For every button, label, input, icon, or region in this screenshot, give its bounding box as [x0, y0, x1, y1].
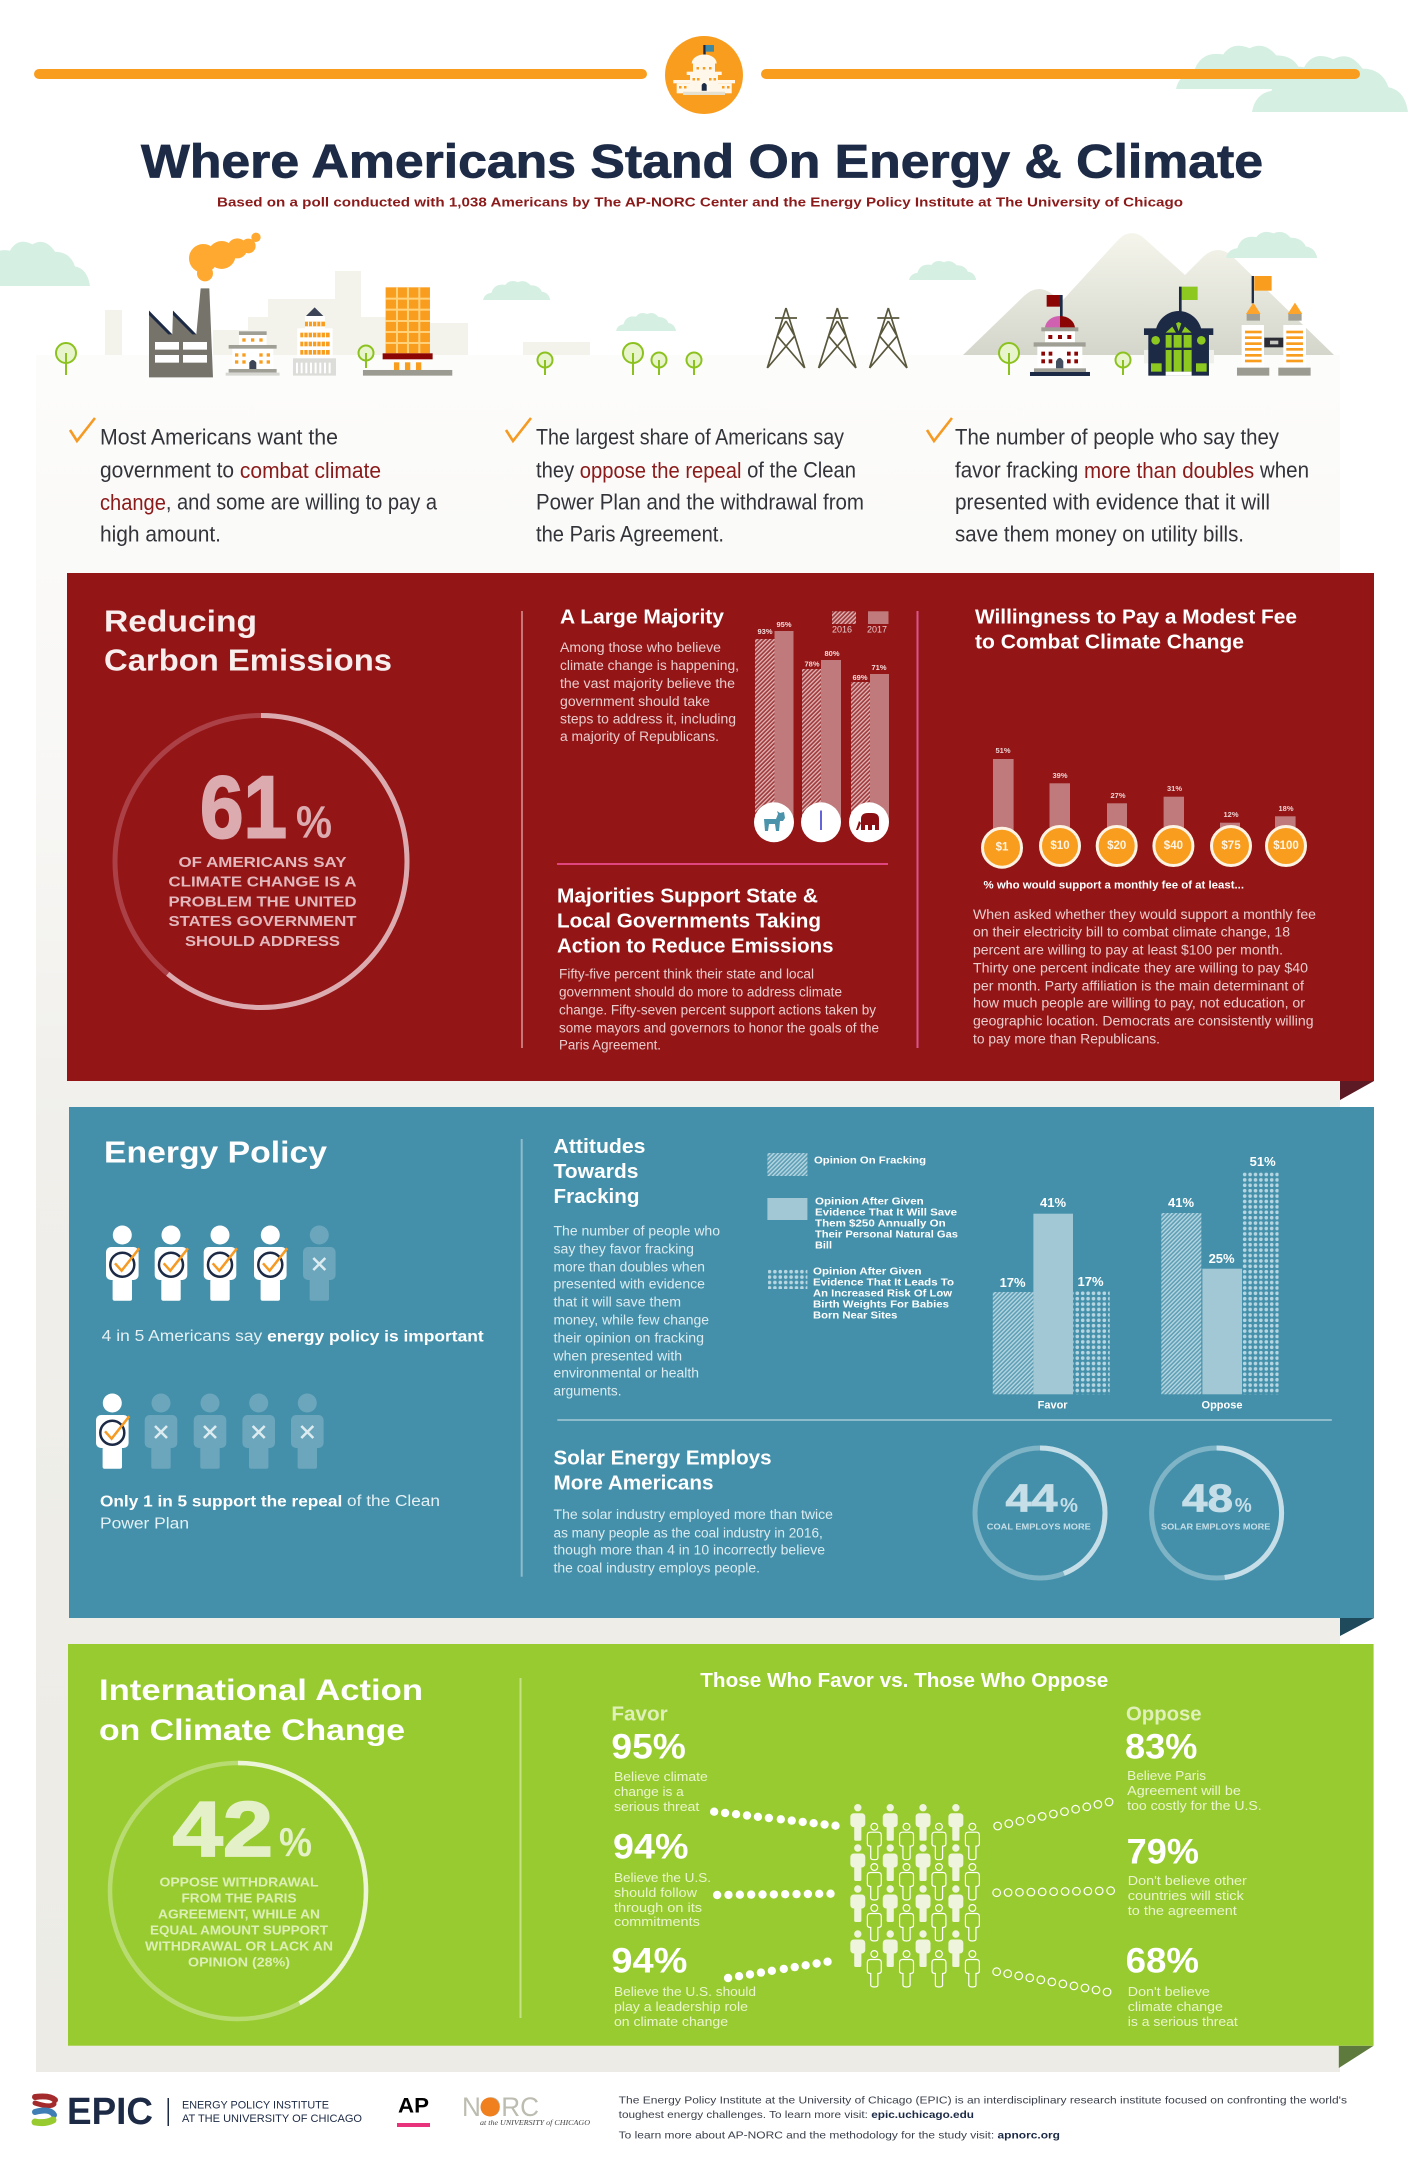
icon: red dome building — [1030, 295, 1090, 376]
bar chart: monthly fee: $10 — [1050, 840, 1070, 852]
stat ring: 42 percent: FROM THE PARIS — [182, 1892, 296, 1906]
text block: solar energy: Solar Energy Employs — [554, 1448, 772, 1470]
key finding 1: change, and some are willing to pay a — [100, 490, 437, 514]
icon: smoke — [189, 233, 261, 281]
bar chart: monthly fee: $100 — [1273, 840, 1299, 852]
bar chart: monthly fee: $20 — [1107, 840, 1126, 852]
column: oppose: Don't believe other — [1128, 1874, 1247, 1888]
legend: fracking chart: Them $250 Annually On — [815, 1218, 946, 1230]
key finding 3: save them money on utility bills. — [955, 522, 1244, 546]
cloud: top right back — [1176, 46, 1318, 89]
stat ring: 42 percent: EQUAL AMOUNT SUPPORT — [150, 1924, 328, 1938]
bar chart: favor and oppose fracking: 41% — [1168, 1195, 1194, 1210]
bar chart: support by party: 95% — [776, 620, 792, 629]
bar chart: support by party: 78% — [804, 660, 820, 668]
footer: AP logo — [397, 2094, 430, 2127]
stat ring: 61 percent — [115, 716, 407, 1008]
cloud: over mountains — [1226, 232, 1317, 258]
pictogram: crowd of people — [850, 1804, 979, 1987]
caption: 1 in 5: Only 1 in 5 support the repeal of the Clean — [100, 1493, 440, 1510]
bar chart: monthly fee: % who would support a monthly fee of at least... — [984, 880, 1244, 892]
pictogram: 4 in 5 — [106, 1226, 336, 1301]
column: favor: Believe the U.S. — [614, 1871, 711, 1885]
column: oppose: countries will stick — [1128, 1889, 1245, 1903]
key finding 3: presented with evidence that it will — [955, 490, 1270, 514]
panel fold — [1339, 2046, 1374, 2068]
subtitle: Based on a poll conducted with 1,038 Americans by The AP-NORC Center and the Energy Policy Institute at The University of Chicago — [217, 194, 1183, 210]
text block: attitudes towards fracking: when presented with — [552, 1348, 682, 1364]
column: oppose: 79% — [1127, 1832, 1199, 1872]
bar chart: favor and oppose fracking: 17% — [1000, 1275, 1026, 1290]
stat ring: 42 percent: OPINION (28%) — [188, 1956, 290, 1970]
title: Where Americans Stand On Energy & Climate — [141, 134, 1263, 188]
heading: international action: on Climate Change — [99, 1714, 405, 1747]
footer: NORC logo — [462, 2092, 590, 2127]
icon: orange flag towers — [1237, 276, 1311, 376]
legend: fracking chart: Evidence That It Will Save — [815, 1208, 958, 1218]
column: oppose: is a serious threat — [1128, 2015, 1238, 2029]
pylons — [767, 308, 907, 368]
legend: fracking chart: Opinion On Fracking — [814, 1156, 926, 1166]
cloud: small right — [909, 261, 976, 280]
mountains — [963, 233, 1334, 355]
footer: EPIC logo — [35, 2091, 362, 2133]
cloud: left — [0, 242, 90, 286]
stat ring: 61 percent: 61 — [200, 758, 287, 856]
text block: solar energy: though more than 4 in 10 incorrectly believe — [554, 1542, 825, 1558]
icon: republican elephant — [849, 802, 889, 842]
legend: 2016 — [832, 625, 852, 635]
text block: solar energy: the coal industry employs people. — [554, 1560, 760, 1576]
civic buildings group — [1030, 276, 1311, 376]
column: favor: change is a — [614, 1785, 684, 1799]
key finding 3: The number of people who say they — [955, 424, 1280, 450]
column: favor: play a leadership role — [614, 2000, 748, 2014]
text block: a large majority: climate change is happening, — [560, 658, 739, 673]
text block: fee explanation: When asked whether they would support a monthly fee — [973, 907, 1316, 922]
legend: fracking chart: Born Near Sites — [813, 1310, 898, 1322]
text block: majorities support: government should do more to address climate — [559, 984, 842, 1000]
bar chart: support by party — [754, 611, 889, 842]
icon: independent line — [801, 802, 841, 842]
stat ring: solar employs more: SOLAR EMPLOYS MORE — [1161, 1522, 1271, 1532]
bar chart: favor and oppose fracking — [993, 1154, 1279, 1412]
key finding 1: government to combat climate — [100, 458, 381, 482]
column: favor: on climate change — [614, 2015, 728, 2029]
stat ring: 42 percent: OPPOSE WITHDRAWAL — [160, 1876, 319, 1890]
stat ring: solar employs more: % — [1235, 1495, 1252, 1517]
column: favor: 94% — [613, 1828, 688, 1866]
text block: attitudes towards fracking: Attitudes — [554, 1136, 646, 1158]
column: oppose: 68% — [1126, 1942, 1199, 1980]
bar chart: favor and oppose fracking: 25% — [1209, 1251, 1235, 1266]
bar chart: monthly fee — [982, 746, 1306, 892]
text block: a large majority: A Large Majority — [560, 606, 725, 628]
bar chart: monthly fee: 12% — [1223, 810, 1239, 819]
key finding 3 — [927, 418, 1309, 546]
stat ring: 61 percent: SHOULD ADDRESS — [185, 933, 340, 950]
stat ring: solar employs more — [1152, 1448, 1282, 1578]
stat ring: solar employs more: 48 — [1182, 1478, 1233, 1520]
text block: fee explanation — [973, 907, 1316, 1046]
column: favor: Believe the U.S. should — [614, 1985, 756, 1999]
footer: EPIC logo: EPIC — [67, 2091, 153, 2133]
bar chart: monthly fee: 39% — [1052, 771, 1068, 780]
text block: majorities support: Fifty-five percent think their state and local — [559, 966, 814, 982]
legend: fracking chart: Evidence That It Leads To — [813, 1278, 954, 1288]
icon: check mark — [506, 418, 531, 441]
text block: attitudes towards fracking: more than doubles when — [554, 1260, 705, 1274]
bar chart: favor and oppose fracking: 41% — [1040, 1195, 1066, 1210]
legend: fracking chart: Birth Weights For Babies — [813, 1300, 949, 1310]
icon: capitol building — [673, 45, 735, 95]
heading: willingness to pay: to Combat Climate Change — [975, 631, 1244, 653]
column: oppose: Don't believe — [1128, 1985, 1210, 1999]
stat ring: 61 percent: OF AMERICANS SAY — [178, 854, 346, 871]
icon: democrat donkey — [754, 802, 794, 842]
text block: fee explanation: how much people are willing to pay, not education, or — [973, 996, 1306, 1010]
text block: a large majority: Among those who believe — [560, 640, 721, 655]
stat ring: coal employs more: 44 — [1006, 1478, 1058, 1520]
panel fold — [1340, 1081, 1374, 1100]
footer: NORC logo: at the UNIVERSITY of CHICAGO — [480, 2119, 590, 2127]
legend: fracking chart: Opinion After Given — [815, 1196, 924, 1208]
key finding 2: The largest share of Americans say — [536, 424, 845, 450]
stat ring: 42 percent: AGREEMENT, WHILE AN — [158, 1908, 320, 1922]
legend: 2017 — [867, 625, 887, 635]
stat ring: 42 percent: % — [279, 1819, 312, 1865]
text block: fee explanation: per month. Party affiliation is the main determinant of — [973, 978, 1304, 994]
legend: fracking chart: Their Personal Natural Gas — [815, 1230, 958, 1240]
text block: a large majority: the vast majority believe the — [560, 676, 735, 691]
text block: solar energy — [554, 1448, 833, 1576]
icon: factory — [149, 288, 213, 377]
bar chart: favor and oppose fracking: 17% — [1077, 1274, 1104, 1289]
heading: willingness to pay: Willingness to Pay a Modest Fee — [975, 606, 1297, 628]
text block: majorities support: Local Governments Taking — [557, 911, 821, 933]
dotted connectors: favor — [710, 1808, 840, 1982]
text block: a large majority — [560, 606, 739, 744]
caption: 1 in 5 — [100, 1493, 440, 1532]
text block: attitudes towards fracking: The number of people who — [554, 1224, 720, 1238]
icon: green building — [1144, 287, 1214, 376]
text block: attitudes towards fracking: presented with evidence — [554, 1276, 705, 1292]
legend: fracking chart: An Increased Risk Of Low — [813, 1288, 952, 1300]
text block: solar energy: More Americans — [554, 1473, 714, 1495]
bar chart: monthly fee: 51% — [995, 746, 1011, 755]
legend — [832, 611, 888, 635]
legend: fracking chart: Opinion After Given — [813, 1266, 922, 1278]
text block: attitudes towards fracking: money, while few change — [554, 1312, 709, 1328]
text block: majorities support: Paris Agreement. — [559, 1038, 661, 1052]
column: favor: commitments — [614, 1915, 700, 1929]
background city blocks — [105, 271, 590, 355]
text block: attitudes towards fracking: that it will save them — [554, 1294, 681, 1310]
text block: attitudes towards fracking: arguments. — [554, 1384, 622, 1398]
heading: international action: International Action — [99, 1674, 423, 1707]
legend: fracking chart — [767, 1153, 958, 1322]
column: oppose — [1125, 1704, 1262, 2029]
pictogram: 1 in 5 — [96, 1394, 324, 1469]
trees — [56, 343, 1130, 375]
heading: favor vs oppose: Those Who Favor vs. Those Who Oppose — [700, 1670, 1108, 1692]
icon: low building — [226, 331, 280, 376]
column: oppose: too costly for the U.S. — [1127, 1799, 1262, 1813]
icon: tall white building — [293, 307, 336, 376]
bar chart: monthly fee: $40 — [1164, 840, 1183, 852]
text block: attitudes towards fracking: say they favor fracking — [554, 1242, 694, 1256]
text block: attitudes towards fracking: Towards — [554, 1161, 638, 1183]
bar chart: monthly fee: 31% — [1167, 784, 1182, 793]
key finding 3: favor fracking more than doubles when — [955, 458, 1309, 482]
bar chart: support by party: 71% — [871, 663, 887, 672]
bar chart: monthly fee: $1 — [996, 842, 1009, 854]
caption: 4 in 5: 4 in 5 Americans say energy policy is important — [102, 1328, 484, 1345]
key finding 2: they oppose the repeal of the Clean — [536, 458, 856, 482]
column: oppose: 83% — [1125, 1728, 1197, 1766]
illustration: skyline scene — [0, 232, 1334, 377]
bar chart: monthly fee: 18% — [1278, 804, 1294, 813]
text block: fee explanation: to pay more than Republicans. — [973, 1032, 1160, 1046]
panel: international action — [68, 1644, 1374, 2068]
stat ring: 42 percent: 42 — [173, 1785, 273, 1873]
text block: majorities support: Action to Reduce Emissions — [557, 936, 834, 958]
cloud: top right front — [1252, 56, 1408, 112]
stat ring: coal employs more: % — [1060, 1495, 1078, 1517]
panel: energy policy — [69, 1107, 1374, 1636]
column: oppose: climate change — [1128, 2000, 1223, 2014]
column: favor: Favor — [611, 1704, 668, 1726]
stat ring: 42 percent — [110, 1763, 366, 2019]
column: oppose: Believe Paris — [1127, 1769, 1206, 1783]
key finding 2: Power Plan and the withdrawal from — [536, 490, 864, 514]
column: favor: serious threat — [614, 1800, 700, 1814]
text block: a large majority: a majority of Republicans. — [560, 729, 719, 744]
footer: AP logo: AP — [398, 2094, 429, 2118]
text block: majorities support: some mayors and governors to honor the goals of the — [559, 1020, 879, 1036]
bar chart: monthly fee: $75 — [1221, 840, 1241, 852]
bar chart: support by party: 69% — [852, 673, 868, 682]
text block: attitudes towards fracking: Fracking — [554, 1186, 640, 1208]
column: favor: should follow — [614, 1886, 698, 1900]
bar chart: monthly fee: 27% — [1110, 791, 1126, 800]
footer: NORC logo: NORC — [462, 2092, 539, 2122]
key finding 2: the Paris Agreement. — [536, 522, 724, 546]
column: oppose: Agreement will be — [1127, 1784, 1241, 1798]
heading: reducing carbon emissions — [104, 604, 392, 678]
text block: solar energy: as many people as the coal industry in 2016, — [554, 1526, 823, 1540]
cloud: small left — [483, 281, 550, 300]
key finding 1 — [70, 418, 437, 546]
panel fold — [1340, 1618, 1374, 1636]
stat ring: coal employs more: COAL EMPLOYS MORE — [987, 1522, 1091, 1532]
header: orange rule with capitol badge — [34, 36, 1408, 114]
text block: solar energy: The solar industry employed more than twice — [554, 1507, 833, 1522]
icon: orange tower — [363, 287, 452, 376]
text block: fee explanation: geographic location. Democrats are consistently willing — [973, 1014, 1314, 1028]
footer: EPIC logo: AT THE UNIVERSITY OF CHICAGO — [182, 2113, 362, 2125]
column: favor: 94% — [611, 1942, 687, 1980]
text block: fee explanation: on their electricity bill to combat climate change, 18 — [973, 924, 1290, 940]
text block: a large majority: government should take — [560, 694, 710, 709]
bar chart: support by party: 93% — [757, 627, 773, 636]
heading: energy policy: Energy Policy — [104, 1134, 328, 1170]
footer: about text — [619, 2095, 1347, 2142]
text block: majorities support: change. Fifty-seven percent support actions taken by — [559, 1002, 876, 1018]
stat ring: 61 percent: PROBLEM THE UNITED — [168, 894, 357, 910]
fee circles — [982, 826, 1306, 867]
text block: majorities support: Majorities Support State & — [557, 886, 818, 908]
bar chart: support by party: 80% — [824, 649, 840, 658]
text block: a large majority: steps to address it, including — [560, 712, 736, 726]
caption: 1 in 5: Power Plan — [100, 1516, 189, 1532]
footer: about text: The Energy Policy Institute at the University of Chicago (EPIC) is an interdisciplinary research institute focused on confronting the world's — [619, 2095, 1347, 2107]
bar chart: favor and oppose fracking: Oppose — [1202, 1400, 1242, 1412]
heading: willingness to pay — [975, 606, 1297, 653]
icon: check mark — [927, 418, 952, 441]
page ground panel — [36, 355, 1340, 2072]
column: oppose: Oppose — [1126, 1704, 1202, 1726]
text block: fee explanation: percent are willing to pay at least $100 per month. — [973, 942, 1283, 958]
column: favor: 95% — [611, 1728, 686, 1766]
footer: EPIC logo: ENERGY POLICY INSTITUTE — [182, 2100, 329, 2112]
stat ring: 61 percent: CLIMATE CHANGE IS A — [168, 874, 357, 890]
stat ring: 61 percent: % — [296, 796, 332, 848]
legend: fracking chart: Bill — [815, 1240, 832, 1252]
factory group and towers — [149, 233, 452, 377]
key finding 1: high amount. — [100, 522, 221, 546]
key finding 1: Most Americans want the — [100, 424, 338, 450]
column: favor: Believe climate — [614, 1770, 708, 1784]
bar chart: favor and oppose fracking: Favor — [1038, 1400, 1068, 1412]
text block: majorities support — [557, 886, 879, 1052]
text block: fee explanation: Thirty one percent indicate they are willing to pay $40 — [973, 960, 1308, 976]
cloud: small center — [616, 313, 676, 331]
text block: attitudes towards fracking: environmental or health — [554, 1366, 699, 1380]
text block: attitudes towards fracking: their opinion on fracking — [554, 1330, 704, 1346]
heading: international action — [99, 1674, 423, 1747]
stat ring: coal employs more — [975, 1448, 1105, 1578]
heading: reducing carbon emissions: Reducing — [104, 604, 257, 638]
column: oppose: to the agreement — [1128, 1904, 1237, 1918]
key finding 2 — [506, 418, 864, 546]
bar chart: favor and oppose fracking: 51% — [1250, 1154, 1276, 1169]
heading: reducing carbon emissions: Carbon Emissions — [104, 642, 392, 678]
dotted connectors: oppose — [993, 1798, 1114, 1996]
column: favor: through on its — [614, 1901, 702, 1915]
footer: about text: toughest energy challenges. To learn more visit: epic.uchicago.edu — [619, 2109, 974, 2121]
icon: check mark — [70, 418, 95, 441]
footer: about text: To learn more about AP-NORC and the methodology for the study visit: apnorc.org — [619, 2130, 1060, 2142]
column: favor — [611, 1704, 756, 2029]
text block: attitudes towards fracking — [552, 1136, 720, 1398]
stat ring: 42 percent: WITHDRAWAL OR LACK AN — [145, 1940, 333, 1954]
panel: reducing carbon emissions — [67, 573, 1374, 1100]
stat ring: 61 percent: STATES GOVERNMENT — [168, 913, 356, 930]
